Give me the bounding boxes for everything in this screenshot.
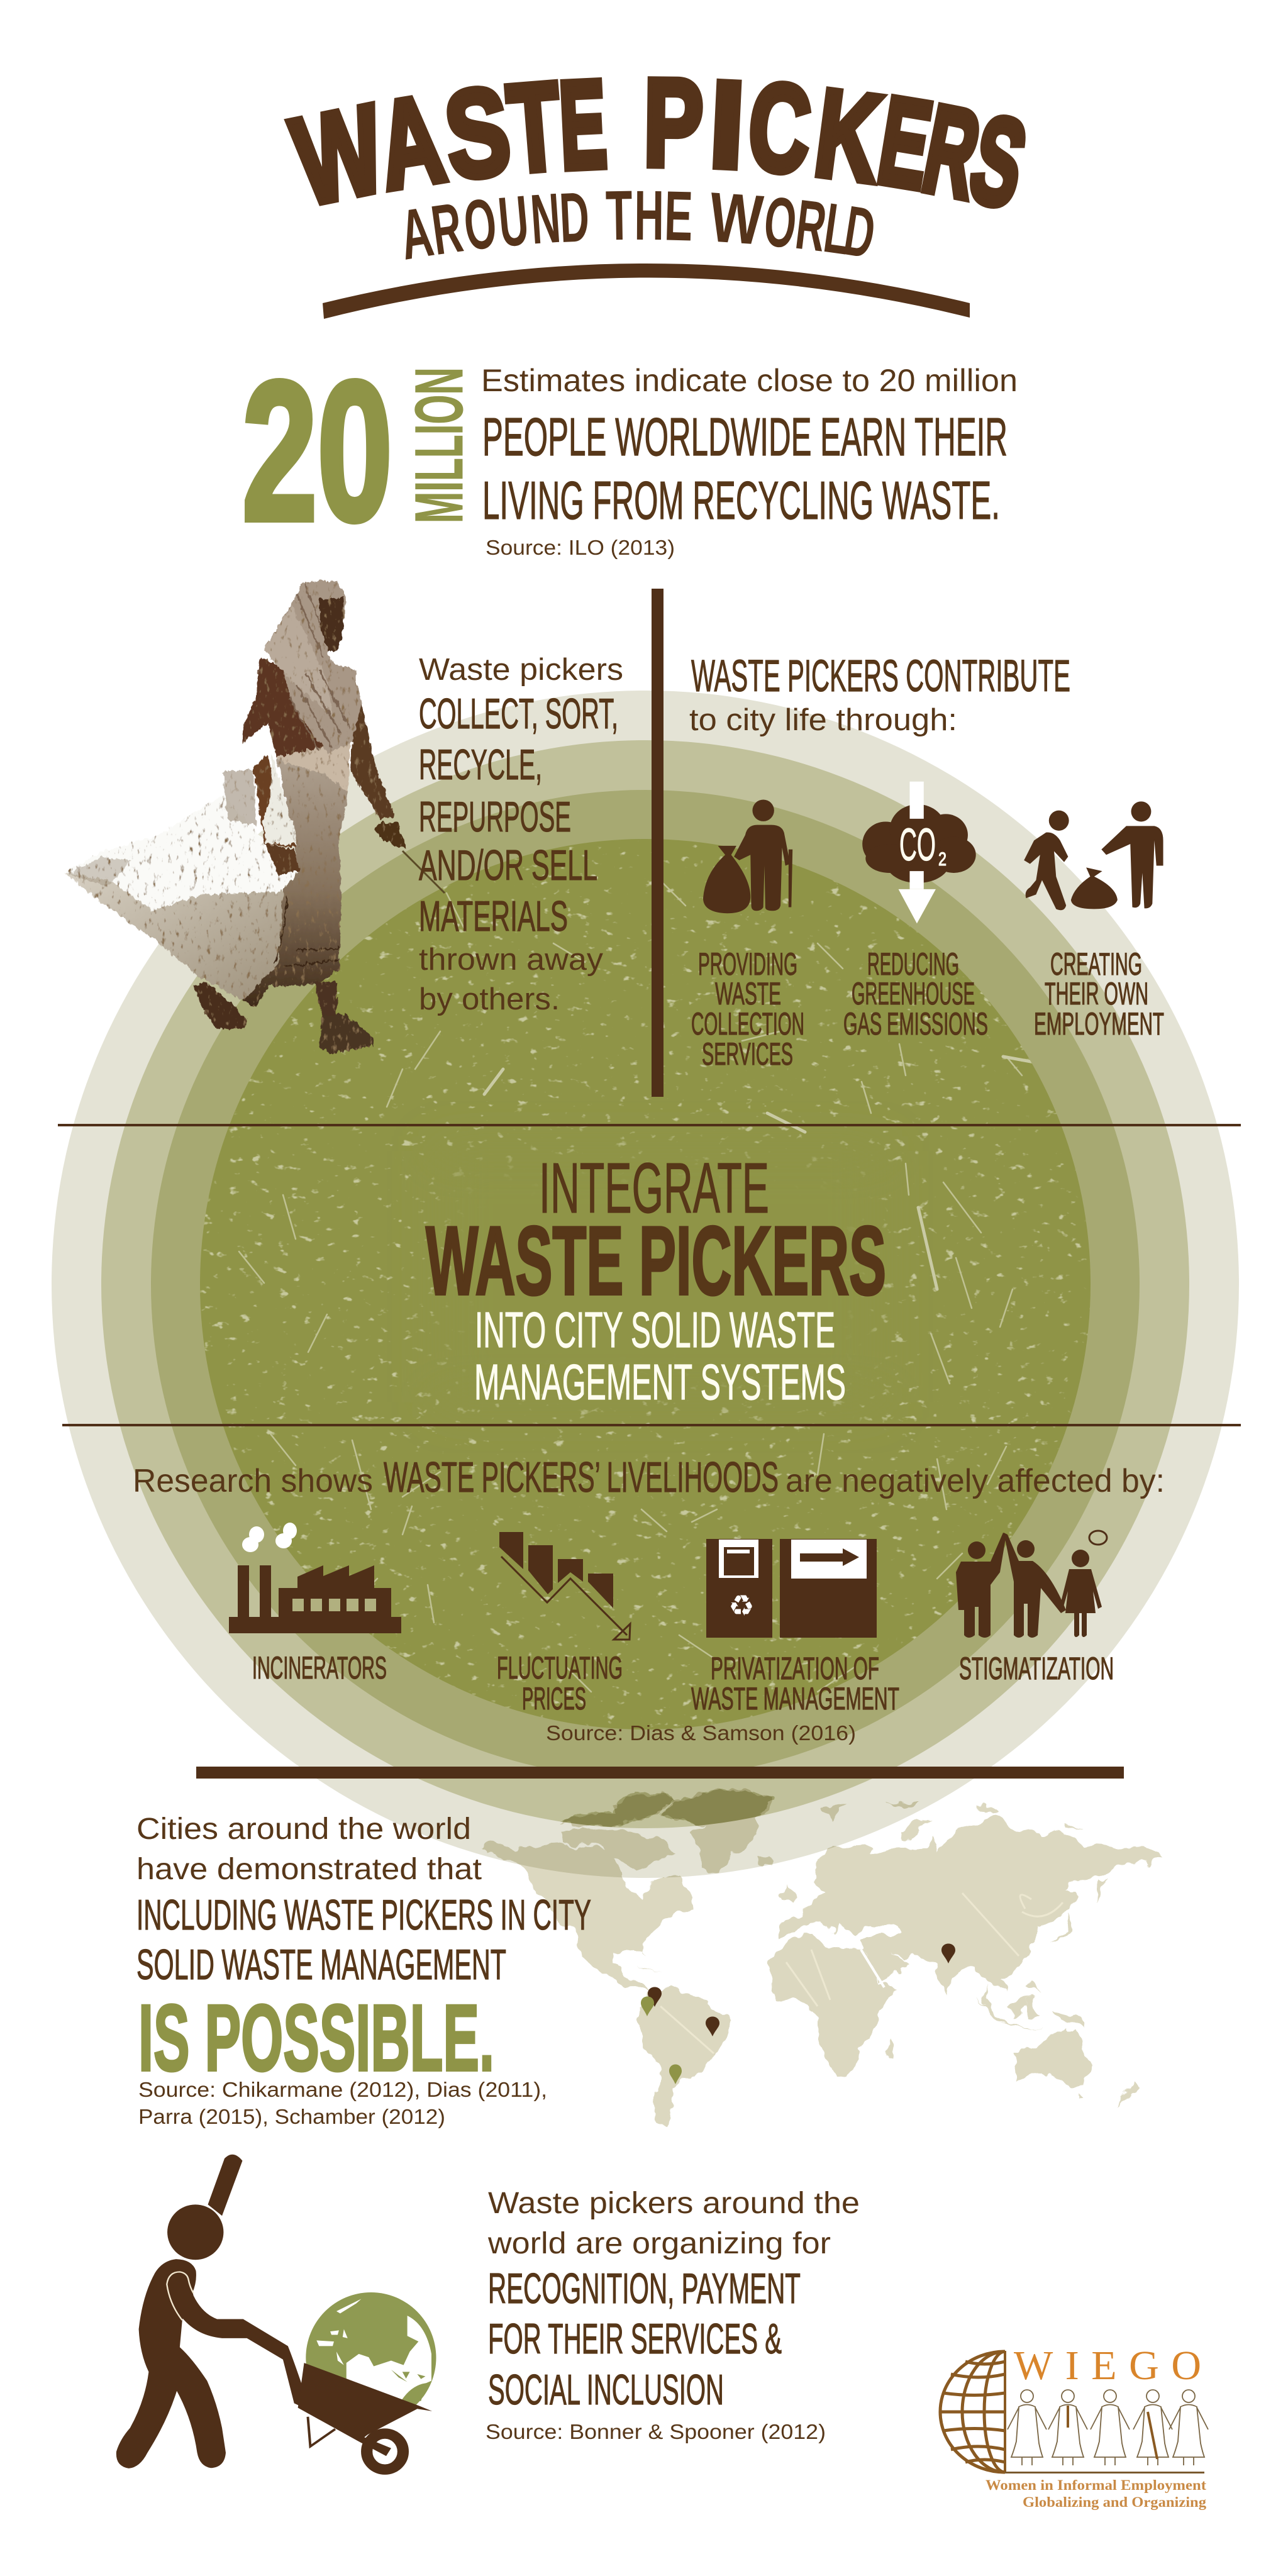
label: providing waste collection services: COLLECTION: [691, 1006, 804, 1041]
title line 2: A: [394, 192, 438, 275]
map pin: Latin America olive: [641, 1996, 654, 2016]
icon: CO2 cloud with arrow: 2: [938, 849, 947, 870]
logo tagline: Women in Informal Employment: [985, 2477, 1206, 2493]
label: creating their own employment: EMPLOYMENT: [1034, 1006, 1164, 1041]
title line 1: [282, 54, 1038, 235]
text: what waste pickers do: thrown away: [419, 943, 604, 977]
label: reducing greenhouse gas emissions: GAS EMISSIONS: [843, 1006, 988, 1041]
map scratches: [660, 1893, 1063, 2053]
label: reducing greenhouse gas emissions: [843, 947, 988, 1041]
text: inclusion is possible: Parra (2015), Schamber (2012): [138, 2105, 445, 2128]
title line 1: S: [438, 62, 517, 206]
text: organizing: RECOGNITION, PAYMENT: [488, 2265, 801, 2312]
text: organizing: Waste pickers around the: [488, 2187, 860, 2220]
text: inclusion is possible: Source: Chikarmane (2012), Dias (2011),: [138, 2078, 547, 2101]
title line 2: N: [528, 179, 563, 259]
research sentence: WASTE PICKERS’ LIVELIHOODS: [384, 1453, 779, 1501]
WIEGO logo: [940, 2343, 1208, 2510]
labels: negative factors: [252, 1650, 1114, 1745]
labels: negative factors: INCINERATORS: [252, 1650, 387, 1685]
icon: person with trash bag: [703, 799, 792, 913]
text: organizing: FOR THEIR SERVICES &: [488, 2315, 782, 2363]
title line 2: T: [605, 176, 633, 255]
title line 2: L: [819, 189, 855, 270]
text: inclusion is possible: IS POSSIBLE.: [138, 1985, 494, 2090]
title line 2: R: [427, 188, 467, 270]
map pin: Latin America brown: [648, 1987, 662, 2007]
labels: negative factors: PRICES: [522, 1681, 586, 1716]
background circles: [52, 691, 1239, 1878]
icon: incinerator factory: [229, 1523, 401, 1633]
text: what waste pickers do: [419, 653, 623, 1016]
text: what waste pickers do: by others.: [419, 982, 560, 1016]
labels: negative factors: Source: Dias & Samson (2016): [546, 1721, 856, 1745]
central message: MANAGEMENT SYSTEMS: [474, 1354, 846, 1410]
title line 2: W: [707, 178, 765, 260]
text: organizing: Source: Bonner & Spooner (2012): [486, 2420, 826, 2443]
labels: negative factors: STIGMATIZATION: [959, 1651, 1114, 1686]
label: providing waste collection services: WASTE: [715, 976, 781, 1011]
title line 1: W: [282, 78, 395, 231]
heading: contribute: [689, 652, 1070, 737]
title line 1: C: [743, 57, 816, 199]
title line 2: D: [558, 178, 591, 258]
thick separator bar: [196, 1767, 1124, 1779]
text: what waste pickers do: RECYCLE,: [419, 741, 542, 789]
title line 1: T: [503, 57, 565, 198]
title line 2: E: [663, 176, 694, 256]
text: organizing: world are organizing for: [487, 2227, 831, 2260]
map pin: India brown: [941, 1943, 955, 1963]
icon: privatization bins: ♻: [728, 1589, 755, 1623]
title: [282, 54, 1038, 275]
rotated word MILLION: MILLION: [401, 367, 477, 523]
central message: INTEGRATE: [539, 1148, 769, 1228]
label: providing waste collection services: [691, 947, 804, 1072]
title line 1: P: [643, 54, 704, 192]
icon: person pushing globe in wheelbarrow: [116, 2155, 436, 2470]
research sentence: [133, 1453, 1165, 1501]
top divider line: [58, 1124, 1241, 1126]
text: what waste pickers do: REPURPOSE: [419, 793, 571, 841]
icon: privatization bins: [706, 1539, 877, 1638]
title line 2: O: [460, 184, 501, 265]
labels: negative factors: WASTE MANAGEMENT: [691, 1681, 899, 1716]
text: organizing: SOCIAL INCLUSION: [488, 2366, 724, 2414]
statistic description: Estimates indicate close to 20 million: [481, 363, 1018, 398]
lower divider line: [62, 1424, 1241, 1426]
research sentence: are negatively affected by:: [786, 1463, 1165, 1499]
WIEGO logo: Globalizing and Organizing: [1023, 2494, 1207, 2510]
title line 2: O: [760, 182, 800, 264]
title line 1: S: [959, 89, 1038, 235]
title line 1: R: [914, 79, 990, 225]
heading: contribute: to city life through:: [689, 703, 957, 737]
vertical divider bar: [652, 589, 663, 1097]
title line 1: K: [808, 64, 888, 209]
icon: CO2 cloud with arrow: [862, 782, 976, 923]
research sentence: Research shows: [133, 1463, 373, 1499]
labels: negative factors: FLUCTUATING: [497, 1650, 623, 1685]
label: reducing greenhouse gas emissions: REDUCING: [867, 947, 959, 982]
picker's stick: [402, 851, 445, 893]
title line 2: [394, 176, 880, 275]
text: inclusion is possible: Cities around the world: [136, 1813, 471, 1846]
title line 1: E: [870, 71, 940, 215]
icon: stigmatization people: [956, 1531, 1107, 1638]
statistic description: [481, 363, 1018, 559]
title line 2: R: [792, 186, 830, 267]
statistic description: Source: ILO (2013): [486, 536, 675, 559]
text: what waste pickers do: Waste pickers: [419, 653, 623, 687]
text: what waste pickers do: MATERIALS: [419, 892, 568, 940]
photo: woman waste picker with sack: [64, 580, 406, 1054]
statistic: 20 million: [242, 340, 477, 562]
icon: people with bag: [1024, 801, 1163, 910]
title line 2: H: [634, 177, 664, 255]
title line 2: D: [839, 191, 880, 274]
text: inclusion is possible: have demonstrated that: [136, 1853, 482, 1886]
map pin: Brazil brown: [706, 2016, 719, 2036]
title swoosh underline: [323, 264, 970, 319]
label: providing waste collection services: SERVICES: [702, 1036, 793, 1072]
title line 1: I: [706, 54, 748, 194]
label: creating their own employment: [1034, 947, 1164, 1041]
label: providing waste collection services: PROVIDING: [698, 947, 797, 982]
central message: [426, 1148, 886, 1410]
text: what waste pickers do: AND/OR SELL: [419, 841, 597, 889]
text: inclusion is possible: INCLUDING WASTE PICKERS IN CITY: [136, 1891, 591, 1939]
globe: [306, 2292, 436, 2423]
labels: negative factors: PRIVATIZATION OF: [711, 1651, 879, 1686]
big number 20: 20: [242, 340, 392, 562]
text: organizing: [486, 2187, 860, 2443]
label: creating their own employment: CREATING: [1050, 947, 1142, 982]
central message: WASTE PICKERS: [426, 1206, 886, 1315]
central message: INTO CITY SOLID WASTE: [475, 1302, 835, 1358]
title line 1: E: [557, 54, 609, 195]
text: inclusion is possible: [136, 1813, 591, 2128]
text: what waste pickers do: COLLECT, SORT,: [419, 690, 618, 738]
title line 1: A: [369, 69, 453, 216]
icon: falling price bars: [499, 1532, 630, 1640]
icon: CO2 cloud with arrow: CO: [899, 820, 936, 870]
map islands over darker ring: [560, 1789, 775, 1828]
logo wordmark: WIEGO: [1014, 2343, 1201, 2389]
title line 2: U: [496, 181, 532, 262]
world map: [480, 1789, 1162, 2126]
label: reducing greenhouse gas emissions: GREENHOUSE: [852, 976, 975, 1011]
logo globe: [938, 2350, 1005, 2474]
text: inclusion is possible: SOLID WASTE MANAGEMENT: [136, 1941, 506, 1989]
map pin: Argentina olive: [669, 2064, 682, 2084]
logo figures: [1008, 2390, 1208, 2465]
label: creating their own employment: THEIR OWN: [1045, 976, 1148, 1011]
